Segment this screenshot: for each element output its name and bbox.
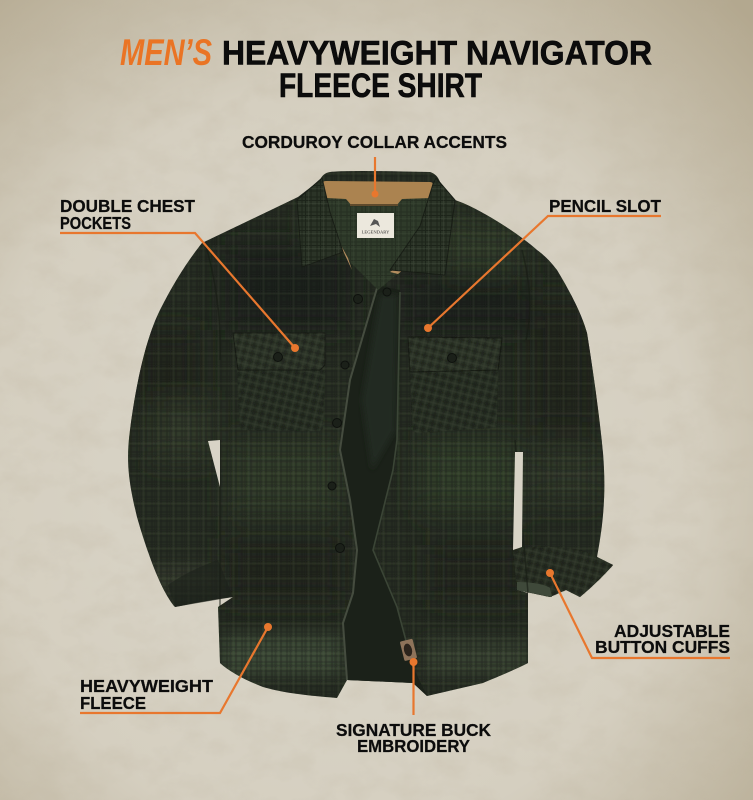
callout: signature buck embroidery: EMBROIDERY bbox=[357, 736, 470, 756]
shirt illustration bbox=[128, 171, 613, 698]
title bbox=[120, 32, 652, 105]
callout: heavyweight fleece: FLEECE bbox=[80, 693, 146, 713]
callout: signature buck embroidery: SIGNATURE BUCK bbox=[336, 720, 491, 740]
callout: double chest pockets: DOUBLE CHEST bbox=[60, 196, 195, 216]
buck embroidery patch bbox=[400, 639, 417, 661]
sleeve seams bbox=[205, 243, 530, 607]
centre opening bbox=[340, 285, 427, 696]
callout: heavyweight fleece bbox=[80, 623, 272, 713]
gaps between sleeves and body bbox=[208, 440, 220, 487]
callout: corduroy collar accents: CORDUROY COLLAR ACCENTS bbox=[242, 132, 507, 152]
callout: pencil slot: PENCIL SLOT bbox=[549, 196, 661, 216]
neck label: LEGENDARY bbox=[362, 230, 390, 234]
collar bbox=[297, 178, 455, 275]
callout: signature buck embroidery bbox=[336, 658, 491, 756]
right chest pocket bbox=[408, 337, 502, 433]
callout: double chest pockets bbox=[60, 196, 299, 352]
buttons bbox=[274, 288, 456, 552]
callout: adjustable button cuffs: BUTTON CUFFS bbox=[595, 637, 730, 657]
cuff details bbox=[513, 547, 613, 597]
callout: corduroy collar accents bbox=[242, 132, 507, 198]
corduroy collar accent bbox=[323, 181, 433, 206]
neck interior bbox=[326, 195, 434, 290]
neck label bbox=[357, 213, 394, 238]
callout: heavyweight fleece: HEAVYWEIGHT bbox=[80, 676, 213, 696]
title: FLEECE SHIRT bbox=[279, 67, 482, 105]
placket edges bbox=[340, 288, 377, 680]
title: MEN’S bbox=[120, 32, 212, 73]
left chest pocket bbox=[233, 333, 325, 431]
callout: double chest pockets: POCKETS bbox=[60, 213, 131, 233]
callout: adjustable button cuffs: ADJUSTABLE bbox=[614, 621, 730, 641]
title: HEAVYWEIGHT NAVIGATOR bbox=[222, 34, 652, 72]
callout: adjustable button cuffs bbox=[546, 569, 730, 658]
callout: pencil slot bbox=[424, 196, 661, 332]
plaid colour blocks bbox=[135, 210, 600, 600]
shirt body and sleeves bbox=[128, 171, 613, 698]
